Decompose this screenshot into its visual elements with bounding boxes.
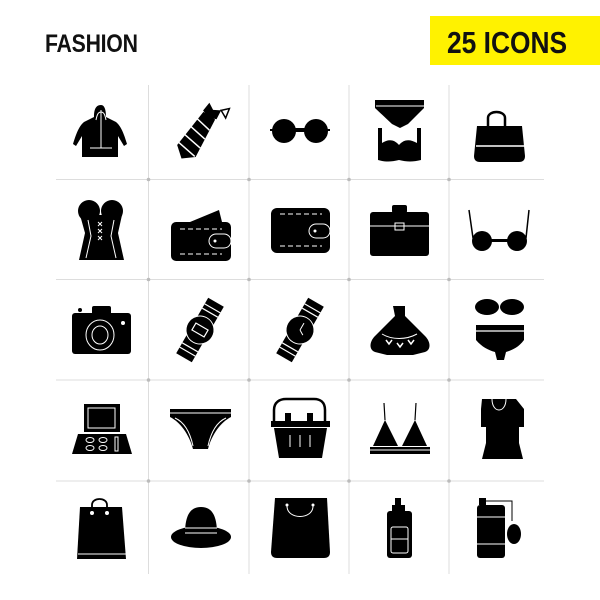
icon: spray bottle <box>387 498 412 558</box>
icon: bikini <box>475 299 524 360</box>
badge: 25 icons: 25 ICONS <box>447 25 567 60</box>
icon: digital watch <box>172 295 228 365</box>
icon: briefcase <box>370 205 429 256</box>
icon: necklace dress <box>370 306 430 355</box>
icon: shopping bag 1 <box>474 112 525 162</box>
icon: wallet open <box>171 210 231 261</box>
icon: wallet <box>271 208 330 253</box>
icon: bra <box>370 403 430 454</box>
icon: hoodie <box>73 105 127 157</box>
icon: perfume <box>477 498 521 558</box>
icon: panties <box>170 409 231 449</box>
icon: hat <box>171 507 231 548</box>
badge: 25 icons <box>430 16 600 65</box>
icon: makeup palette <box>72 404 132 454</box>
icon: analog watch <box>272 295 328 365</box>
icon: shopping bag 2 <box>77 499 126 559</box>
icon: t-shirt <box>481 399 524 459</box>
icon: sunglasses <box>270 119 330 143</box>
icon: camera <box>72 306 131 354</box>
icon: basket <box>271 399 330 458</box>
icon: glasses <box>469 210 529 251</box>
icon: tie <box>172 95 231 167</box>
icon: tote bag <box>271 498 330 558</box>
title: FASHION <box>45 30 138 58</box>
icon: corset <box>78 200 124 260</box>
icon: swimsuit <box>375 100 424 162</box>
